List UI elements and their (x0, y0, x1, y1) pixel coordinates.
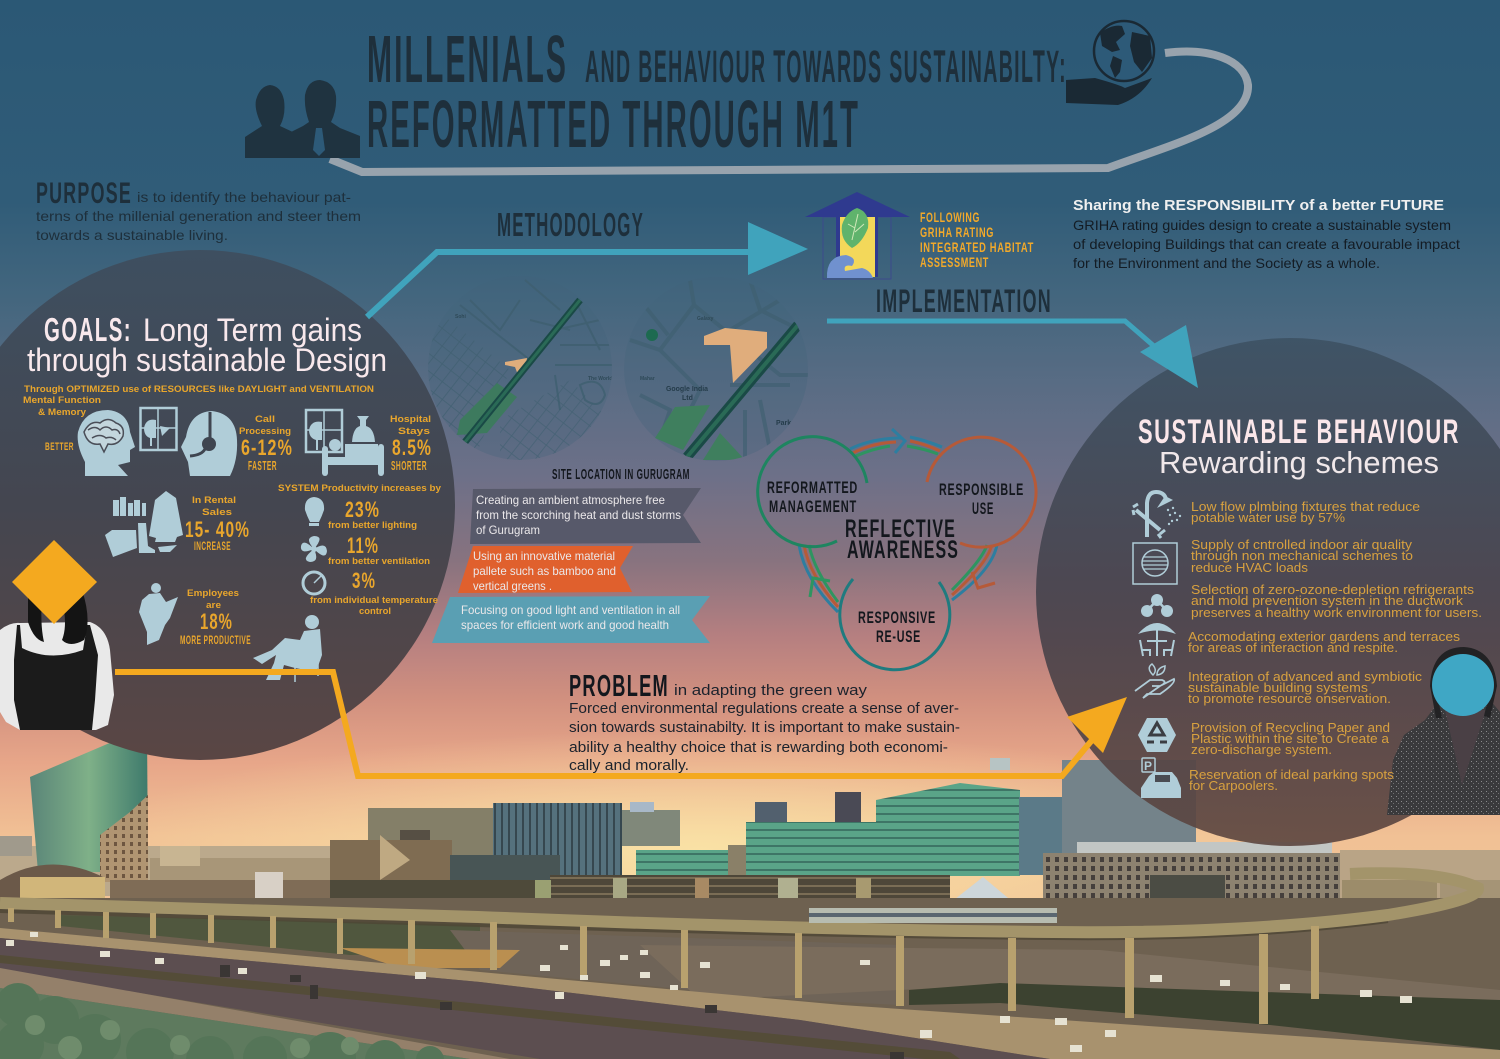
goals statistics text: Employees (187, 588, 239, 599)
goals statistics text: 8.5% (392, 435, 432, 460)
icon: carpool parking: P (1144, 759, 1152, 773)
griha caption: GRIHA RATING (920, 224, 994, 240)
ribbon: material palette: Using an innovative material (473, 549, 615, 563)
icon: reading employee (139, 583, 178, 645)
goals statistics text: Call (255, 414, 275, 425)
icon: shower and wrench (1133, 492, 1181, 538)
icon: seated person (253, 615, 322, 682)
icon: thermostat dial (303, 572, 325, 594)
goals statistics text: Through OPTIMIZED use of RESOURCES like DAYLIGHT and VENTILATION (24, 384, 374, 395)
rewarding schemes list: Supply of cntrolled indoor air quality (1191, 537, 1413, 552)
map: site location close view: Park (776, 420, 791, 427)
rewarding schemes list: Selection of zero-ozone-depletion refrigerants (1191, 582, 1475, 597)
goals statistics text: Mental Function (23, 395, 101, 406)
left goals circle background (0, 250, 455, 760)
ribbon: light and ventilation: spaces for efficient work and good health (461, 618, 669, 632)
map: site location close view: Galaxy (697, 316, 714, 322)
icon: fan (301, 536, 327, 562)
goals statistics text: Processing (239, 426, 291, 437)
ribbon: light and ventilation (432, 596, 710, 643)
problem text block (569, 668, 960, 774)
methodology arrow (367, 222, 808, 317)
goals statistics text: In Rental (192, 495, 236, 506)
ribbon: light and ventilation: Focusing on good light and ventilation in all (461, 603, 680, 617)
sustainable behaviour heading: Rewarding schemes (1159, 445, 1439, 480)
icon: recycling hexagon (1138, 718, 1176, 752)
cycle labels: RESPONSIBLE (939, 480, 1024, 499)
goals statistics text: Stays (398, 426, 430, 437)
ribbon: material palette: vertical greens . (473, 579, 552, 593)
cycle labels: MANAGEMENT (769, 497, 857, 516)
rewarding schemes list: potable water use by 57% (1191, 510, 1345, 525)
title: MILLENIALS (367, 22, 568, 97)
purpose text: PURPOSE (36, 177, 132, 210)
goals statistics text: 18% (200, 609, 233, 634)
cycle labels (767, 478, 1024, 646)
icon: patio umbrella table (1138, 623, 1176, 656)
ribbon: material palette (458, 546, 633, 593)
rewarding schemes list: for areas of interaction and respite. (1188, 640, 1398, 655)
ribbon: material palette: pallete such as bamboo and (473, 564, 616, 578)
sharing responsibility text: of developing Buildings that can create a favourable impact (1073, 236, 1460, 252)
sharing responsibility text: for the Environment and the Society as a whole. (1073, 255, 1380, 271)
goals heading (27, 311, 387, 378)
ribbon: ambient atmosphere (470, 488, 701, 544)
sustainable behaviour heading (1138, 413, 1460, 480)
griha caption (920, 209, 1034, 270)
rewarding schemes list: Provision of Recycling Paper and (1191, 720, 1390, 735)
icon: brain head (78, 410, 135, 476)
purpose text: terns of the millenial generation and steer them (36, 208, 361, 224)
icon: carpool parking (1141, 758, 1181, 798)
rewarding schemes list: Reservation of ideal parking spots (1189, 767, 1395, 782)
problem text block: ability a healthy choice that is rewarding both economi- (569, 740, 948, 756)
goals statistics text: 6-12% (241, 435, 293, 460)
goals statistics text: from better lighting (328, 520, 417, 531)
rewarding schemes list: Accomodating exterior gardens and terraces (1188, 629, 1461, 644)
rewarding schemes list: through non mechanical schemes to (1191, 548, 1413, 563)
goals statistics text: SHORTER (391, 458, 427, 473)
goals statistics text: MORE PRODUCTIVE (180, 633, 251, 647)
goals statistics text: are (206, 600, 221, 611)
problem text block: sion towards sustainabilty. It is important to make sustain- (569, 720, 960, 736)
goals statistics text: & Memory (38, 407, 87, 418)
horizon glow (80, 730, 1320, 970)
title: REFORMATTED THROUGH M1T (367, 87, 860, 162)
rewarding schemes list: and mold prevention system in the ductwork (1191, 593, 1464, 608)
methodology heading: METHODOLOGY (497, 206, 644, 243)
goals statistics text: Hospital (390, 414, 431, 425)
map: site location close view: Google India (666, 386, 708, 393)
ribbon: ambient atmosphere: Creating an ambient atmosphere free (476, 493, 665, 507)
rewarding schemes list: preserves a healthy work environment for users. (1191, 605, 1482, 620)
icon: hand with leaves (1135, 664, 1174, 698)
purpose text (36, 177, 361, 243)
goals statistics text: 11% (347, 533, 379, 558)
goals statistics text: BETTER (45, 441, 74, 453)
goals statistics text: 3% (352, 568, 376, 593)
icon: molecule (1141, 594, 1173, 617)
sharing responsibility text: GRIHA rating guides design to create a sustainable system (1073, 217, 1451, 233)
title (367, 22, 1067, 162)
map: site location close view: Mahar (640, 376, 655, 382)
map: site location wide view: The World (588, 376, 612, 382)
goals heading: GOALS: (44, 311, 132, 348)
rewarding schemes list: Integration of advanced and symbiotic (1188, 669, 1423, 684)
rewarding schemes list: for Carpoolers. (1189, 778, 1278, 793)
icon: millennial people (245, 80, 360, 158)
map: site location close view: Ltd (682, 395, 693, 402)
griha caption: FOLLOWING (920, 209, 980, 225)
griha logo (805, 192, 910, 279)
rewarding schemes list: zero-discharge system. (1191, 742, 1332, 757)
icon: light bulb (305, 497, 324, 526)
goals statistics text: control (359, 606, 391, 617)
map: site location wide view (428, 280, 612, 460)
icon: globe in hand (1066, 21, 1154, 105)
goals statistics text: INCREASE (194, 539, 231, 553)
implementation heading: IMPLEMENTATION (876, 283, 1052, 319)
site location caption: SITE LOCATION IN GURUGRAM (552, 466, 690, 483)
title swoosh (330, 52, 1248, 172)
cycle labels: RE-USE (876, 627, 921, 646)
right sustainable behaviour circle background (1036, 338, 1500, 846)
goals statistics text: from individual temperature (310, 595, 438, 606)
cycle labels: AWARENESS (847, 536, 959, 564)
goals heading: through sustainable Design (27, 342, 387, 378)
goals statistics text: SYSTEM Productivity increases by (278, 483, 442, 494)
reflective awareness cycle diagram (758, 429, 1036, 670)
ribbon: ambient atmosphere: of Gurugram (476, 523, 540, 537)
rewarding schemes list: Low flow plmbing fixtures that reduce (1191, 499, 1420, 514)
rewarding schemes list: sustainable building systems (1188, 680, 1369, 695)
goals statistics text: FASTER (248, 458, 277, 473)
cycle labels: REFORMATTED (767, 478, 858, 497)
goals statistics text: 23% (345, 497, 380, 522)
problem text block: cally and morally. (569, 758, 689, 774)
woman figure with diamond (0, 540, 114, 730)
griha caption: INTEGRATED HABITAT (920, 239, 1034, 255)
icon: window (140, 408, 177, 450)
problem text block: PROBLEM (569, 668, 669, 703)
sharing responsibility text (1073, 198, 1460, 271)
problem text block: Forced environmental regulations create a sense of aver- (569, 701, 959, 717)
icon: air vent (1133, 543, 1177, 584)
purpose text: towards a sustainable living. (36, 227, 228, 243)
goals statistics text: 15- 40% (185, 517, 250, 542)
cycle labels: RESPONSIVE (858, 608, 936, 627)
yellow journey arrow (115, 672, 1127, 776)
icon: hospital bed and nurse (306, 410, 384, 476)
map: site location wide view: Sohi (455, 314, 466, 320)
griha caption: ASSESSMENT (920, 254, 989, 270)
goals statistics text: Sales (202, 507, 232, 518)
map: site location close view (624, 277, 808, 461)
goals statistics text (23, 384, 442, 647)
goals heading: Long Term gains (143, 312, 362, 348)
ribbon: ambient atmosphere: from the scorching heat and dust storms (476, 508, 681, 522)
rewarding schemes list: reduce HVAC loads (1191, 560, 1309, 575)
rewarding schemes list (1188, 499, 1482, 793)
problem text block: in adapting the green way (674, 683, 868, 699)
purpose text: is to identify the behaviour pat- (137, 189, 351, 205)
rewarding schemes list: Plastic within the site to Create a (1191, 731, 1390, 746)
icon: shopping items (105, 491, 183, 557)
city photograph (0, 727, 1500, 1059)
cycle labels: REFLECTIVE (845, 515, 956, 543)
implementation arrow (827, 321, 1198, 388)
man figure with teal circle (1387, 647, 1500, 815)
cycle labels: USE (972, 499, 994, 518)
rewarding schemes list: to promote resource onservation. (1188, 691, 1391, 706)
goals statistics text: from better ventilation (328, 556, 430, 567)
icon: headset head (181, 411, 237, 476)
sharing responsibility text: Sharing the RESPONSIBILITY of a better FUTURE (1073, 198, 1444, 214)
